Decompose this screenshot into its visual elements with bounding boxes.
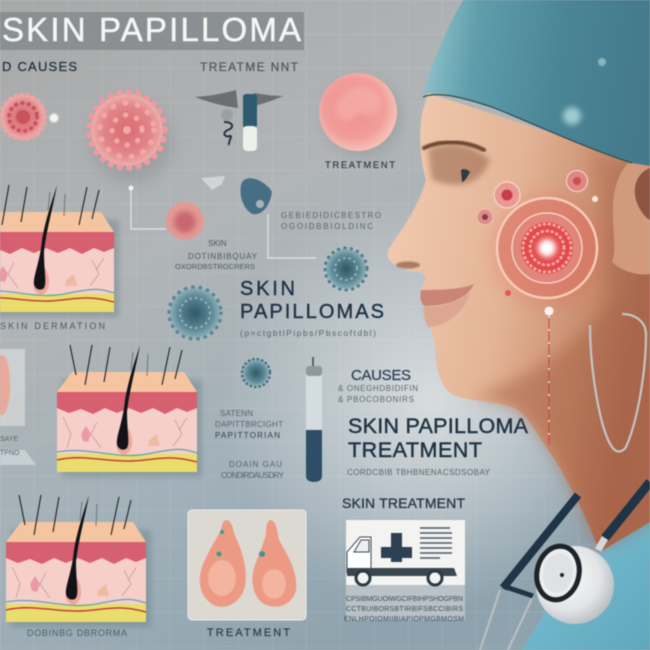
- left glass slide: TPNO: [0, 450, 20, 457]
- card form lines: [420, 528, 452, 558]
- upper lip: [420, 284, 474, 306]
- panel: treatment tray: [188, 510, 306, 620]
- label: skin block 1: SKIN DERMATION: [0, 321, 105, 331]
- eye: [461, 169, 470, 182]
- panel: ambulance card: ENLHPOIOMIIBIAPIOPMGBMOSM: [344, 616, 464, 623]
- dashed laser line highlights: [548, 316, 550, 445]
- small text: papilloma labels: DAPITTBRCIGHT: [215, 420, 283, 429]
- panel: ambulance card: CPSIBMGUOIWGCIFBIHPSHOGPBN: [346, 596, 463, 603]
- virus: dark small: [242, 359, 270, 387]
- heading: skin papilloma treatment: [348, 414, 529, 462]
- icon: blue device: [201, 176, 272, 214]
- lower lip: [424, 292, 470, 327]
- connector lines: [131, 188, 316, 259]
- neck shading: [470, 290, 650, 550]
- label: skin block 3: DOBINBG DBRORMA: [27, 628, 127, 638]
- small text: papilloma labels: [215, 409, 285, 480]
- text: causes block: & ONEGHDBIDIFIN: [338, 384, 418, 393]
- title: SKIN PAPILLOMA: [2, 11, 301, 48]
- small text: papilloma labels: PAPITTORIAN: [215, 431, 280, 440]
- heading: skin papilloma treatment: SKIN PAPILLOMA: [348, 414, 529, 438]
- heading: treatment top: TREATME NNT: [200, 60, 299, 74]
- small text: papilloma labels: SATENN: [220, 409, 253, 418]
- pink treatment ball: [319, 73, 401, 156]
- eye socket shadow: [428, 144, 490, 185]
- heading: skin papilloma treatment: TREATMENT: [348, 438, 482, 462]
- label: treatment ball: TREATMENT: [325, 160, 395, 171]
- small text: skin label: DOTINBIBQUAY: [188, 252, 258, 261]
- lobe right: [252, 520, 296, 607]
- label: treatment tray: TREATMENT: [207, 627, 290, 639]
- virus: teal large: [169, 287, 221, 339]
- left glass slide: SAYE: [0, 436, 18, 443]
- brow: [424, 142, 484, 150]
- heading: causes: D CAUSES: [2, 59, 77, 74]
- icon: caduceus and capsule: [195, 90, 283, 151]
- heading: skin papillomas: [240, 278, 384, 323]
- heading: skin treatment: SKIN TREATMENT: [342, 495, 465, 511]
- scrubs: [522, 518, 650, 650]
- surgical cap: [422, 0, 650, 166]
- virus: large pink: [89, 92, 172, 182]
- small text: skin label: SKIN: [208, 239, 227, 248]
- skin block 3: [6, 495, 151, 627]
- panel: ambulance card: [344, 520, 465, 623]
- skin block 2: [57, 345, 202, 477]
- glow dot: [50, 114, 58, 122]
- small text: right of device: GEBIEDIDICBESTRO: [281, 211, 381, 220]
- figure: patient profile: [388, 0, 650, 650]
- connector dot: [128, 186, 134, 190]
- face and neck silhouette: [388, 93, 650, 552]
- lesion: small cells: [477, 170, 598, 316]
- heading: skin papillomas: SKIN: [240, 278, 295, 300]
- virus: small pink: [1, 95, 45, 139]
- small text: right of device: [281, 211, 381, 231]
- text: causes block: [338, 367, 418, 404]
- small text: skin label: [175, 239, 258, 271]
- cap light spot: [563, 107, 581, 125]
- small text: right of device: OGOIDBBIOLDINC: [281, 222, 373, 231]
- lobe left: [200, 520, 246, 607]
- small text: papillomas caption: (p=ctgbtlPipbs/Pbscoftdbl): [240, 328, 376, 338]
- icon: cross: [381, 533, 412, 562]
- dashed laser line: [548, 316, 550, 445]
- heading: skin papillomas: PAPILLOMAS: [240, 301, 384, 323]
- panel: ambulance card: CCTBUIBORSBTIRBIFSBCCIBIRS: [346, 606, 463, 613]
- skin block 1: [0, 185, 119, 317]
- virus: teal right: [325, 248, 367, 290]
- lesion: laser target: [490, 192, 606, 308]
- ear: [612, 152, 650, 274]
- text: causes block: CAUSES: [351, 367, 411, 384]
- left glass slide: [0, 349, 36, 465]
- icon: van: [347, 537, 457, 585]
- text: causes block: & PBOCOBONIRS: [338, 395, 414, 404]
- temple shading: [590, 150, 650, 300]
- pink round growth: [166, 202, 204, 240]
- small text: treatment caption: CORDCBIB TBHBNENACSDSOBAY: [347, 468, 491, 477]
- small text: papilloma labels: DOAIN GAU: [229, 460, 282, 469]
- stethoscope: [480, 482, 650, 650]
- small text: skin label: OXORDBSTROCRERS: [175, 262, 255, 271]
- icon: test tube: [306, 357, 322, 482]
- stethoscope ear loop: [590, 314, 646, 452]
- small text: papilloma labels: CONDIRDAUSDRY: [221, 471, 285, 480]
- nostril: [396, 262, 420, 268]
